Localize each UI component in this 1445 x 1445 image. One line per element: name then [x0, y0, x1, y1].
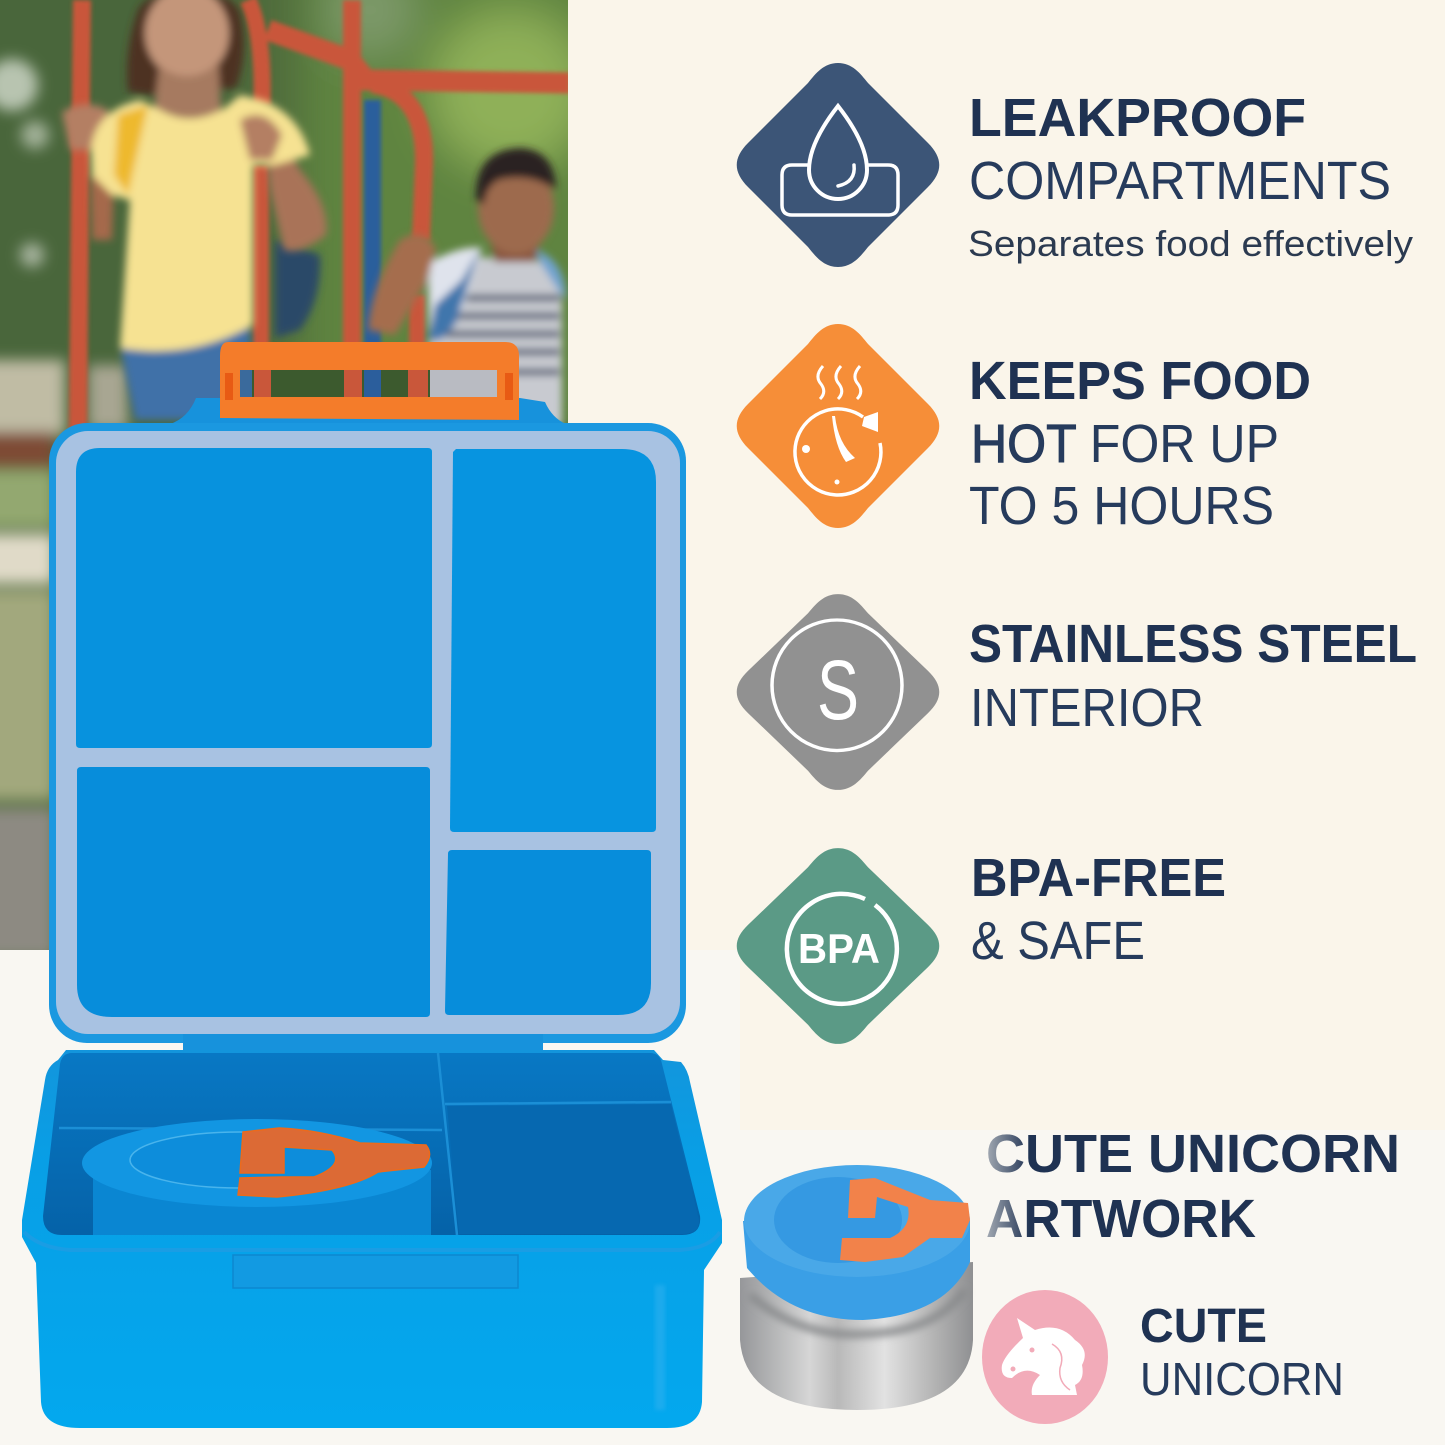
- icon: unicorn badge: [982, 1290, 1108, 1424]
- view through handle opening: [238, 368, 500, 399]
- girl hair: [127, 0, 244, 95]
- icon: stainless steel badge: S: [817, 643, 859, 737]
- lid gasket: [56, 431, 680, 1034]
- lid compartment 3: [77, 767, 430, 1017]
- icon: stainless steel badge: [737, 594, 939, 790]
- label: cute unicorn: [1140, 1300, 1344, 1405]
- base interior: [43, 1053, 700, 1235]
- heading: BPA free and safe: & SAFE: [971, 911, 1145, 971]
- heading: keeps food hot: [969, 351, 1311, 536]
- blue playground post: [364, 100, 381, 400]
- lid compartment 1: [76, 448, 432, 748]
- hinge: [183, 1034, 543, 1054]
- heading: leakproof compartments: LEAKPROOF: [969, 88, 1306, 148]
- icon: leakproof water drop: [737, 63, 939, 267]
- heading: stainless steel interior: [969, 614, 1417, 738]
- orange handle: [220, 342, 519, 420]
- table surface: [0, 950, 740, 1445]
- label: cute unicorn: UNICORN: [1140, 1353, 1344, 1405]
- lid outer: [49, 423, 686, 1043]
- heading: cute unicorn artwork: [986, 1124, 1400, 1249]
- heading: keeps food hot: TO 5 HOURS: [969, 476, 1274, 536]
- heading: stainless steel interior: STAINLESS STEEL: [969, 614, 1417, 674]
- heading: keeps food hot: KEEPS FOOD: [969, 351, 1311, 411]
- girl face and neck: [145, 0, 229, 79]
- base right compartment shading: [447, 1104, 699, 1234]
- interior dividers: [59, 1053, 671, 1235]
- heading: BPA free and safe: [971, 848, 1226, 971]
- playground frame: [78, 0, 570, 435]
- heading: keeps food hot: HOT FOR UP: [971, 414, 1279, 474]
- product: open bento lunch box: [22, 342, 722, 1428]
- base exterior: [22, 1050, 722, 1428]
- handle slots: [225, 373, 513, 400]
- girl shirt: [91, 95, 310, 351]
- icon: BPA free badge: BPA: [798, 925, 880, 972]
- icon: hot food clock: [737, 324, 939, 528]
- girl backpack: [275, 240, 320, 338]
- base rim highlight: [24, 1232, 720, 1250]
- heading: leakproof compartments: [968, 88, 1413, 264]
- lid compartment 4: [445, 850, 651, 1015]
- heading: stainless steel interior: INTERIOR: [970, 678, 1204, 738]
- heading: leakproof compartments: Separates food effectively: [968, 223, 1413, 264]
- boy: [428, 257, 562, 425]
- girl jeans: [120, 320, 250, 420]
- inner food jar: [82, 1119, 432, 1235]
- heading: leakproof compartments: COMPARTMENTS: [969, 151, 1391, 211]
- heading: cute unicorn artwork: ARTWORK: [986, 1189, 1256, 1249]
- front clasp: [233, 1255, 518, 1288]
- label: cute unicorn: CUTE: [1140, 1300, 1267, 1353]
- product: stainless steel food jar: [740, 1165, 973, 1410]
- cream panel edge: [568, 0, 740, 950]
- soft white band behind bottom right: [700, 1130, 1445, 1445]
- girl arms: [262, 120, 326, 251]
- lid handle mount: [170, 398, 566, 424]
- lid compartment 2: [450, 449, 656, 832]
- base corner highlight: [655, 1285, 665, 1410]
- jar orange clip: [840, 1178, 970, 1262]
- heading: cute unicorn artwork: CUTE UNICORN: [986, 1124, 1400, 1184]
- icon: BPA free badge: [737, 848, 939, 1044]
- photo: children at playground: [0, 0, 630, 958]
- heading: BPA free and safe: BPA-FREE: [971, 848, 1226, 908]
